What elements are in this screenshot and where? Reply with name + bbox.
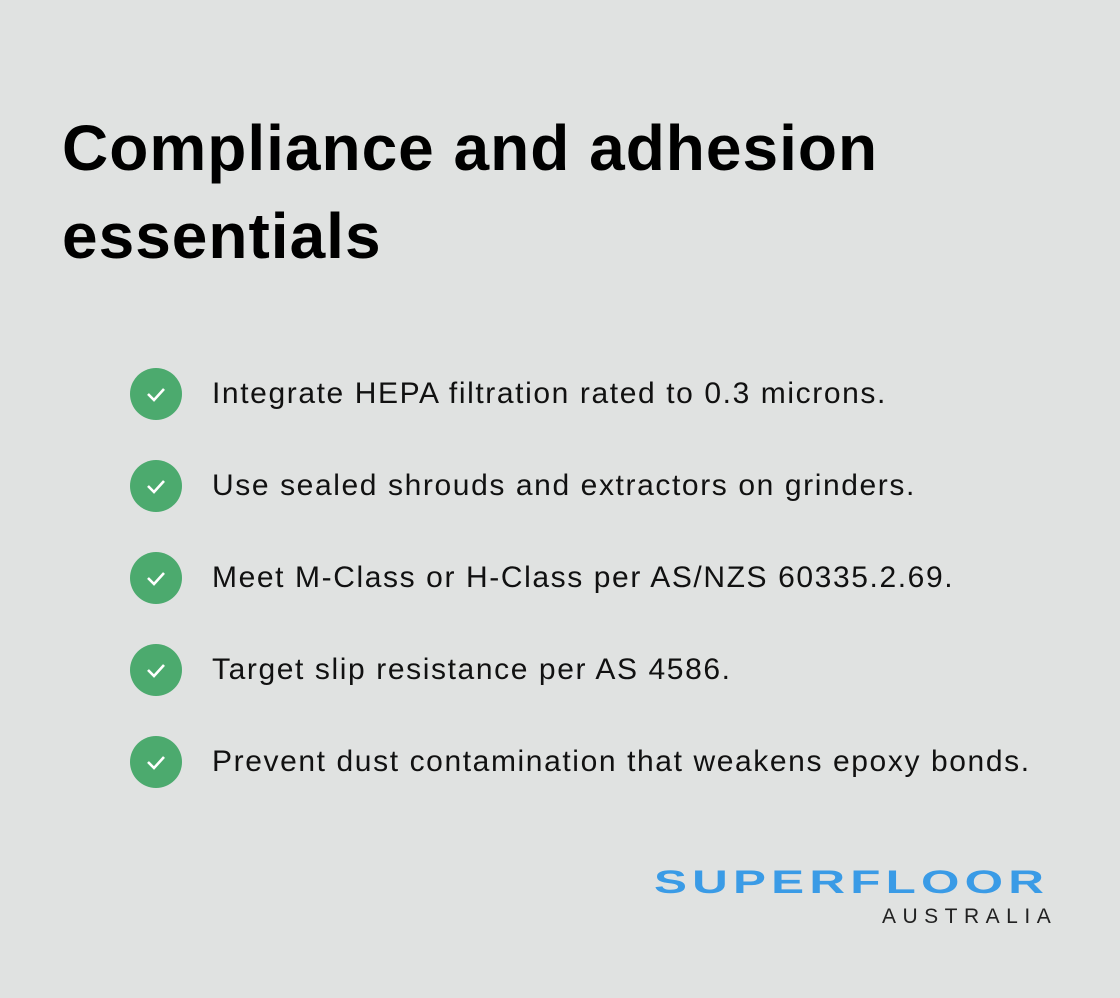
title [62, 112, 878, 272]
item 1: Integrate HEPA filtration rated to 0.3 microns. [212, 377, 887, 410]
item 2: Use sealed shrouds and extractors on grinders. [212, 469, 916, 502]
logo [654, 865, 1057, 928]
item 3: Meet M-Class or H-Class per AS/NZS 60335.2.69. [212, 561, 954, 594]
title: essentials [62, 200, 382, 272]
item 2 [130, 460, 916, 512]
title: Compliance and adhesion [62, 112, 878, 184]
logo: SUPERFLOOR [654, 865, 1049, 901]
item 1 [130, 368, 887, 420]
item 4: Target slip resistance per AS 4586. [212, 653, 732, 686]
item 5: Prevent dust contamination that weakens epoxy bonds. [212, 745, 1031, 778]
logo: AUSTRALIA [882, 905, 1057, 928]
item 5 [130, 736, 1031, 788]
item 4 [130, 644, 732, 696]
item 3 [130, 552, 954, 604]
